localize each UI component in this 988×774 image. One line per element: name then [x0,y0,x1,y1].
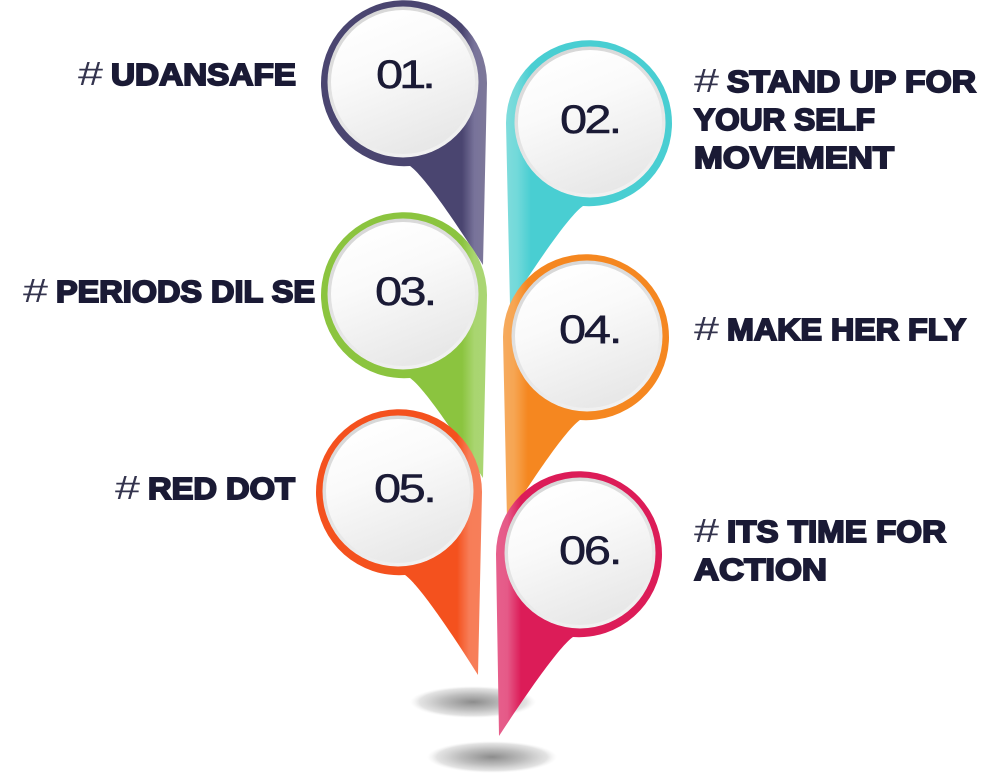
label 06 [694,512,946,587]
number 03: 03. [375,270,437,314]
label 02: # [694,62,720,99]
label 06: ITS TIME FOR [727,514,946,549]
pin 02 [506,40,672,305]
number 04: 04. [559,308,622,352]
label 02: MOVEMENT [694,140,894,175]
label 03: PERIODS DIL SE [56,274,315,309]
label 01: UDANSAFE [111,57,296,92]
label 02: STAND UP FOR [727,64,976,99]
label 05: RED DOT [148,471,295,506]
ground shadow: right [427,741,557,773]
ground shadow: left [410,686,536,718]
pin 06 [496,471,662,736]
label 04: MAKE HER FLY [727,312,966,347]
pin 04 [503,254,669,520]
label 04: # [694,310,720,347]
pin 03 [321,212,487,478]
number 06: 06. [559,529,622,573]
label 06: # [694,512,720,549]
label 06: ACTION [694,552,827,587]
number 05: 05. [374,467,437,511]
label 02 [694,62,976,175]
number 02: 02. [560,98,622,142]
pin 01 [321,0,487,265]
label 05: # [115,469,141,506]
label 01: # [78,55,104,92]
label 03: # [23,272,49,309]
label 02: YOUR SELF [694,102,875,137]
pin 05 [316,409,482,675]
number 01: 01. [376,53,436,97]
